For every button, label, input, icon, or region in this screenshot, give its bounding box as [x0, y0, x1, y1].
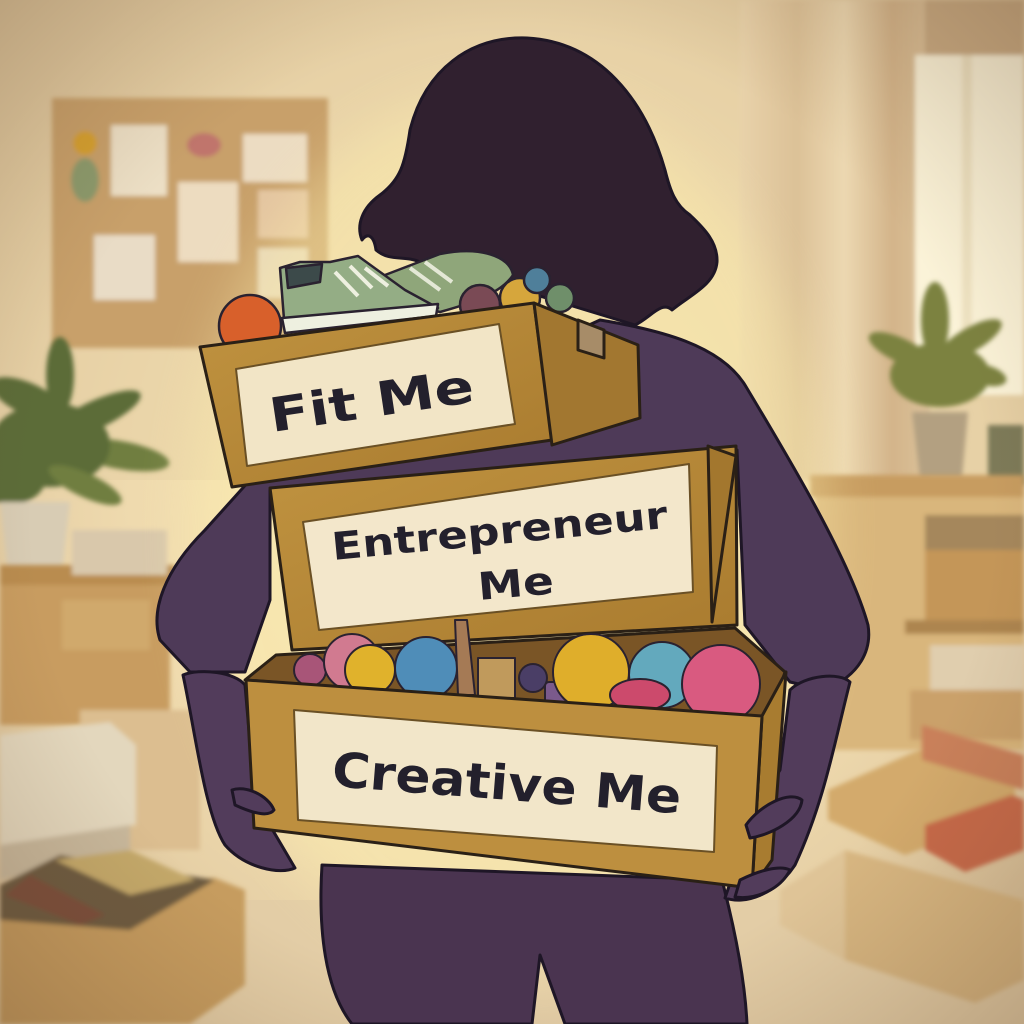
label: Fit Me: Fit Me	[266, 359, 478, 444]
right hand	[725, 676, 850, 900]
back inside of the box	[245, 628, 785, 720]
yarn and craft supplies	[294, 620, 760, 723]
box: Entrepreneur Me	[270, 446, 737, 650]
label: Creative Me	[294, 710, 717, 852]
person	[157, 38, 869, 1024]
legs	[321, 865, 747, 1024]
torso and arms	[157, 320, 869, 690]
background boxes right	[780, 725, 1024, 1003]
side panel	[752, 672, 786, 888]
fingers	[232, 789, 802, 898]
label: Fit Me	[236, 324, 515, 466]
icon: yarn balls small	[460, 267, 574, 325]
background plant left	[0, 337, 172, 572]
front panel	[246, 680, 762, 888]
top box contents: shoes and yarn	[219, 251, 574, 357]
label: Creative Me: Creative Me	[330, 742, 683, 825]
background cork board with notes	[52, 98, 328, 348]
background boxes left	[0, 722, 245, 1024]
icon: green shoe back	[385, 251, 513, 312]
box: Creative Me	[245, 620, 786, 888]
hair	[360, 38, 717, 325]
left hand	[183, 672, 295, 871]
box: Fit Me	[200, 303, 640, 487]
icon: yarn ball orange	[219, 295, 281, 357]
label: Entrepreneur Me	[303, 464, 693, 630]
background shelves right	[810, 475, 1024, 750]
background furniture left	[0, 530, 200, 850]
background curtains and window	[740, 0, 1024, 480]
background plant right	[864, 282, 1024, 485]
label: Entrepreneur Me: Entrepreneur	[330, 493, 670, 569]
icon: green shoe front	[280, 256, 438, 333]
label: Entrepreneur Me: Me	[476, 559, 555, 609]
warm glow around person	[190, 90, 830, 970]
